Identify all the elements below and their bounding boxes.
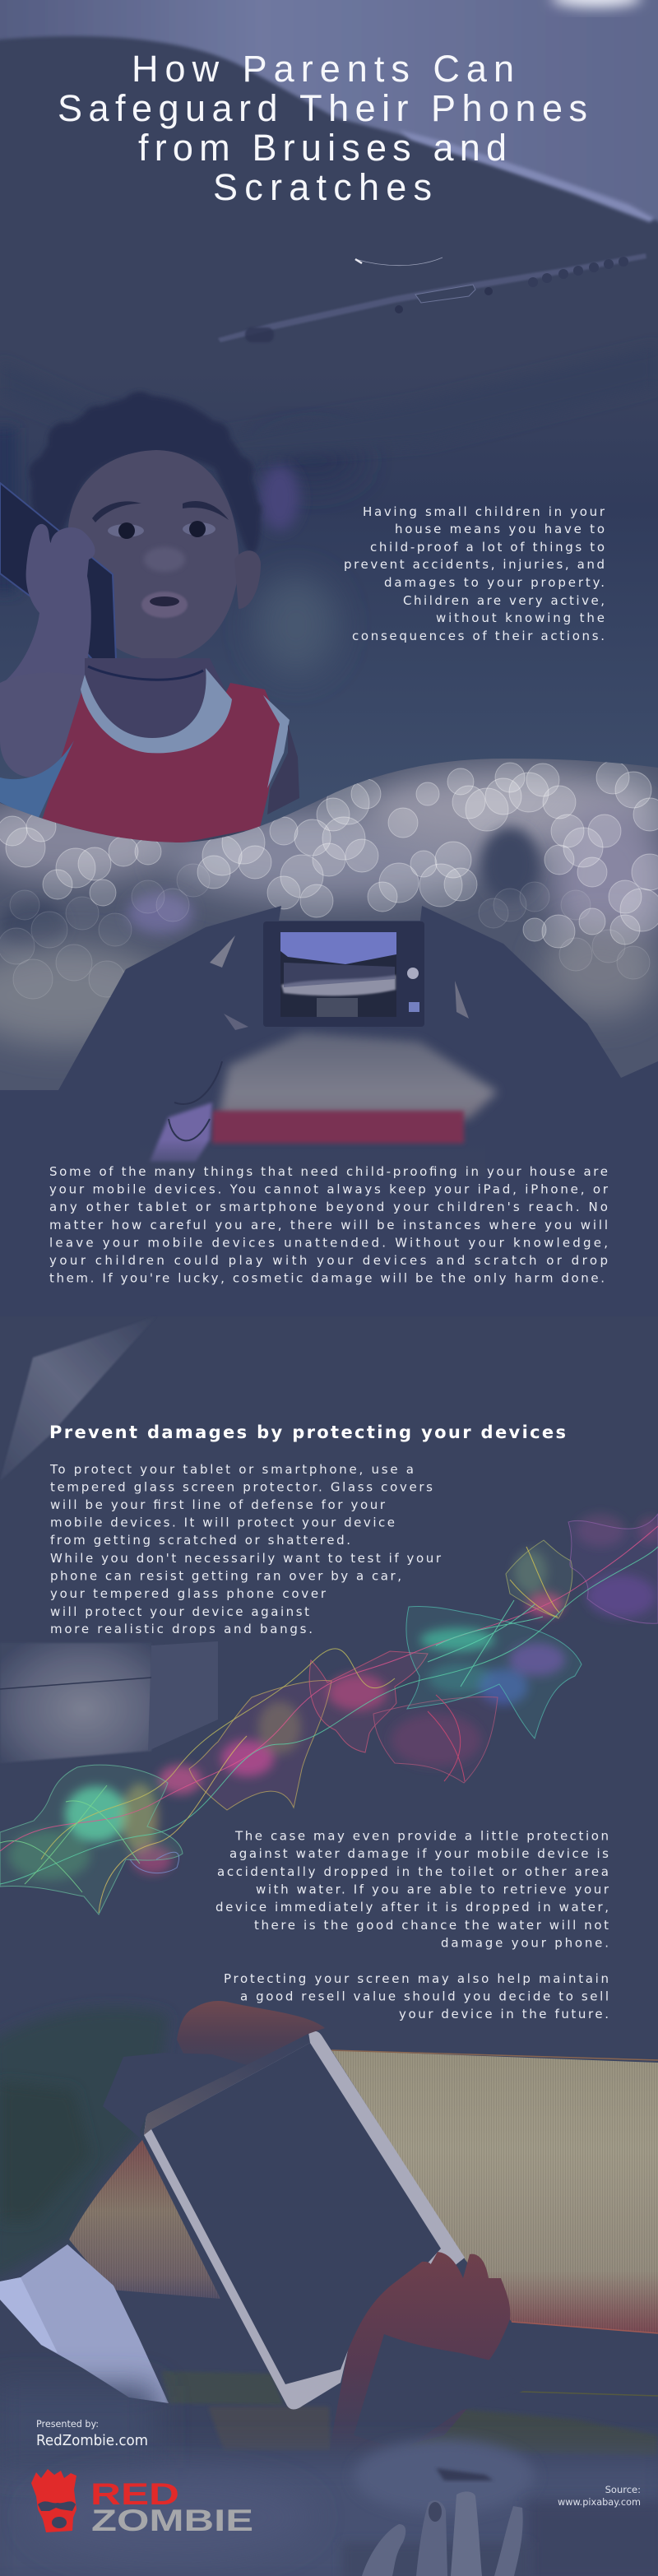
text: intro paragraph: Having small children in your bbox=[363, 504, 605, 519]
photo: phone close-up header bbox=[0, 0, 658, 342]
text: source bbox=[558, 2484, 641, 2508]
text: resale paragraph bbox=[224, 1971, 609, 2021]
title: from Bruises and bbox=[138, 127, 507, 169]
text: intro paragraph: without knowing the bbox=[436, 610, 605, 625]
couch fabric left bbox=[69, 2140, 220, 2299]
chest bbox=[85, 658, 232, 741]
text: intro paragraph: house means you have to bbox=[395, 522, 605, 536]
text: source: www.pixabay.com bbox=[558, 2496, 641, 2508]
text: resale paragraph: Protecting your screen may also help maintain bbox=[224, 1971, 609, 1986]
logo: Red Zombie: ZOMBIE bbox=[91, 2504, 253, 2537]
olive area beneath tablet bbox=[161, 2371, 658, 2456]
artwork: rainbow smoke ribbon bbox=[0, 1514, 658, 1915]
ribbon colour glow bbox=[8, 1514, 658, 1880]
text: child-proofing paragraph: your mobile devices. You cannot always keep your iPad, iPhone, or bbox=[49, 1181, 609, 1196]
dark sleeve at top hand bbox=[103, 2053, 247, 2140]
text: child-proofing paragraph: leave your mobile devices unattended. Without your knowledge, bbox=[49, 1236, 608, 1251]
text: resale paragraph: your device in the future. bbox=[399, 2007, 609, 2021]
photo: child on the phone bbox=[0, 346, 658, 844]
ribbon veils with fine outlines bbox=[0, 1514, 658, 1915]
backdrop blur patches bbox=[0, 346, 658, 675]
hair bbox=[29, 392, 262, 554]
text: tempered glass paragraph: phone can resist getting ran over by a car, bbox=[50, 1568, 401, 1583]
text: water damage paragraph: The case may even provide a little protection bbox=[234, 1829, 609, 1844]
text: tempered glass paragraph: While you don't necessarily want to test if your bbox=[50, 1551, 442, 1566]
title: Scratches bbox=[213, 166, 432, 208]
collar bbox=[0, 2244, 169, 2403]
text: intro paragraph bbox=[344, 504, 605, 643]
photo: hands holding a tablet on a couch bbox=[0, 2001, 658, 2576]
tablet bbox=[144, 2031, 465, 2409]
text: water damage paragraph: there is the good chance the water will not bbox=[254, 1918, 609, 1933]
text: intro paragraph: prevent accidents, injuries, and bbox=[344, 557, 605, 572]
text: water damage paragraph: device immediately after it is dropped in water, bbox=[215, 1900, 609, 1915]
text: tempered glass paragraph: will protect your device against bbox=[50, 1604, 309, 1619]
text: child-proofing paragraph: matter how careful you are, there will be instances where you will bbox=[49, 1218, 608, 1232]
text: child-proofing paragraph bbox=[49, 1164, 609, 1285]
text: child-proofing paragraph: any other tablet or smartphone beyond your children's reach. No bbox=[49, 1200, 608, 1214]
text: water damage paragraph: accidentally dropped in the toilet or other area bbox=[217, 1864, 609, 1879]
text: tempered glass paragraph: mobile devices. It will protect your device bbox=[50, 1515, 395, 1530]
text: child-proofing paragraph: your children could play with your devices and scratch or drop bbox=[49, 1253, 608, 1268]
text: tempered glass paragraph: more realistic drops and bangs. bbox=[50, 1622, 313, 1636]
text: child-proofing paragraph: them. If you're lucky, cosmetic damage will be the only harm done. bbox=[49, 1270, 605, 1285]
hand bottom bbox=[328, 2252, 510, 2460]
text: tempered glass paragraph: your tempered glass phone cover bbox=[50, 1586, 327, 1601]
hand bbox=[0, 524, 95, 708]
dark green shoulder bbox=[0, 2007, 169, 2281]
text: water damage paragraph: damage your phone. bbox=[441, 1935, 609, 1950]
silhouette: hands bbox=[0, 906, 658, 1316]
text: presented by: RedZombie.com bbox=[36, 2433, 148, 2449]
text: tempered glass paragraph: from getting scratched or shattered. bbox=[50, 1533, 350, 1548]
face bbox=[68, 450, 239, 661]
photo: hands filming with a phone against bokeh lights bbox=[0, 759, 658, 1163]
text: intro paragraph: Children are very active, bbox=[403, 593, 605, 608]
logo: Red Zombie bbox=[31, 2469, 253, 2537]
phone bbox=[0, 483, 116, 666]
collar and sleeves bbox=[81, 668, 232, 753]
text: intro paragraph: child-proof a lot of things to bbox=[370, 540, 605, 555]
text: resale paragraph: a good resell value should you decide to sell bbox=[240, 1989, 609, 2004]
text: water damage paragraph bbox=[215, 1829, 609, 1950]
heading: prevent damages: Prevent damages by protecting your devices bbox=[49, 1423, 566, 1442]
couch fabric right bbox=[331, 2050, 658, 2333]
text: intro paragraph: consequences of their actions. bbox=[352, 629, 605, 643]
text: presented by bbox=[36, 2418, 148, 2449]
icon: zombie head bbox=[31, 2469, 76, 2532]
text: source: Source: bbox=[605, 2484, 641, 2495]
text: tempered glass paragraph bbox=[49, 1462, 442, 1636]
title bbox=[58, 48, 587, 208]
logo: Red Zombie: RED bbox=[90, 2477, 179, 2511]
text: tempered glass paragraph: tempered glass screen protector. Glass covers bbox=[50, 1479, 433, 1494]
fog and red band bbox=[150, 1033, 498, 1162]
text: tempered glass paragraph: To protect your tablet or smartphone, use a bbox=[49, 1462, 414, 1477]
photo: building shapes bbox=[0, 1316, 218, 1763]
wrist shadow bbox=[354, 2334, 526, 2450]
hand top bbox=[177, 2001, 325, 2077]
lower blurred face backdrop bbox=[0, 2386, 658, 2576]
phone screen bbox=[263, 921, 424, 1027]
eyes, nose and mouth bbox=[92, 501, 229, 618]
red shirt bbox=[41, 683, 280, 844]
text: presented by: Presented by: bbox=[36, 2418, 99, 2430]
text: water damage paragraph: with water. If you are able to retrieve your bbox=[256, 1882, 609, 1897]
title: How Parents Can bbox=[132, 48, 514, 90]
bokeh lights bbox=[0, 749, 658, 1094]
text: water damage paragraph: against water damage if your mobile device is bbox=[229, 1846, 609, 1861]
text: intro paragraph: damages to your property. bbox=[384, 575, 605, 590]
arm bbox=[0, 672, 85, 777]
child photo backdrop bbox=[0, 370, 658, 831]
ribbon fine strands bbox=[0, 1526, 658, 1913]
title: Safeguard Their Phones bbox=[58, 87, 587, 129]
text: tempered glass paragraph: will be your first line of defense for your bbox=[50, 1497, 386, 1512]
text: child-proofing paragraph: Some of the many things that need child-proofing in your house are bbox=[49, 1164, 608, 1179]
